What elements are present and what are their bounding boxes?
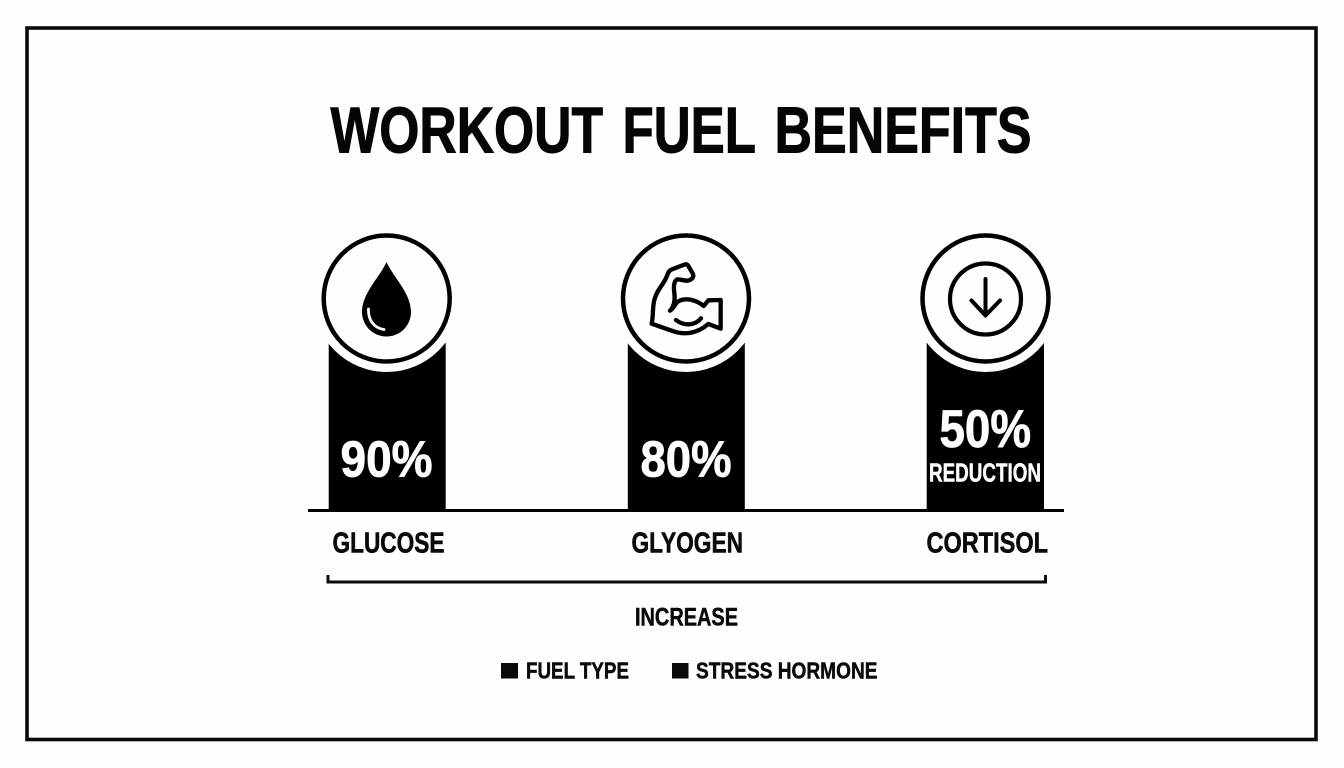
title: BENEFITS: [774, 94, 1032, 166]
icon: water drop badge: [313, 225, 460, 372]
title: FUEL: [622, 94, 756, 166]
bar: glucose: [313, 225, 460, 510]
bar body: glucose: [329, 343, 446, 510]
legend label: stress hormone: STRESS HORMONE: [696, 658, 878, 684]
title: WORKOUT: [330, 94, 603, 166]
title: [330, 94, 1032, 166]
bar body: glycogen: [628, 343, 745, 510]
icon: flexed muscle badge: [612, 225, 760, 372]
value: 90%: 90%: [340, 430, 432, 488]
reduction caption: REDUCTION: [929, 458, 1041, 488]
bracket label: increase: INCREASE: [635, 604, 738, 632]
value: 80%: 80%: [640, 430, 732, 488]
legend label: fuel type: FUEL TYPE: [526, 658, 629, 684]
baseline axis: [308, 509, 1064, 512]
label: glyogen: GLYOGEN: [632, 528, 743, 560]
icon: down arrow badge: [912, 225, 1059, 372]
bar: cortisol: [912, 225, 1059, 510]
bar: glycogen: [612, 225, 760, 510]
legend: [501, 658, 878, 684]
bar body: cortisol: [927, 343, 1044, 510]
legend swatch: fuel type: [501, 663, 518, 678]
value: 50%: 50%: [940, 400, 1031, 459]
bracket: [328, 575, 1046, 582]
label: glucose: GLUCOSE: [332, 528, 444, 560]
label: cortisol: CORTISOL: [926, 528, 1048, 560]
legend swatch: stress hormone: [672, 663, 688, 678]
